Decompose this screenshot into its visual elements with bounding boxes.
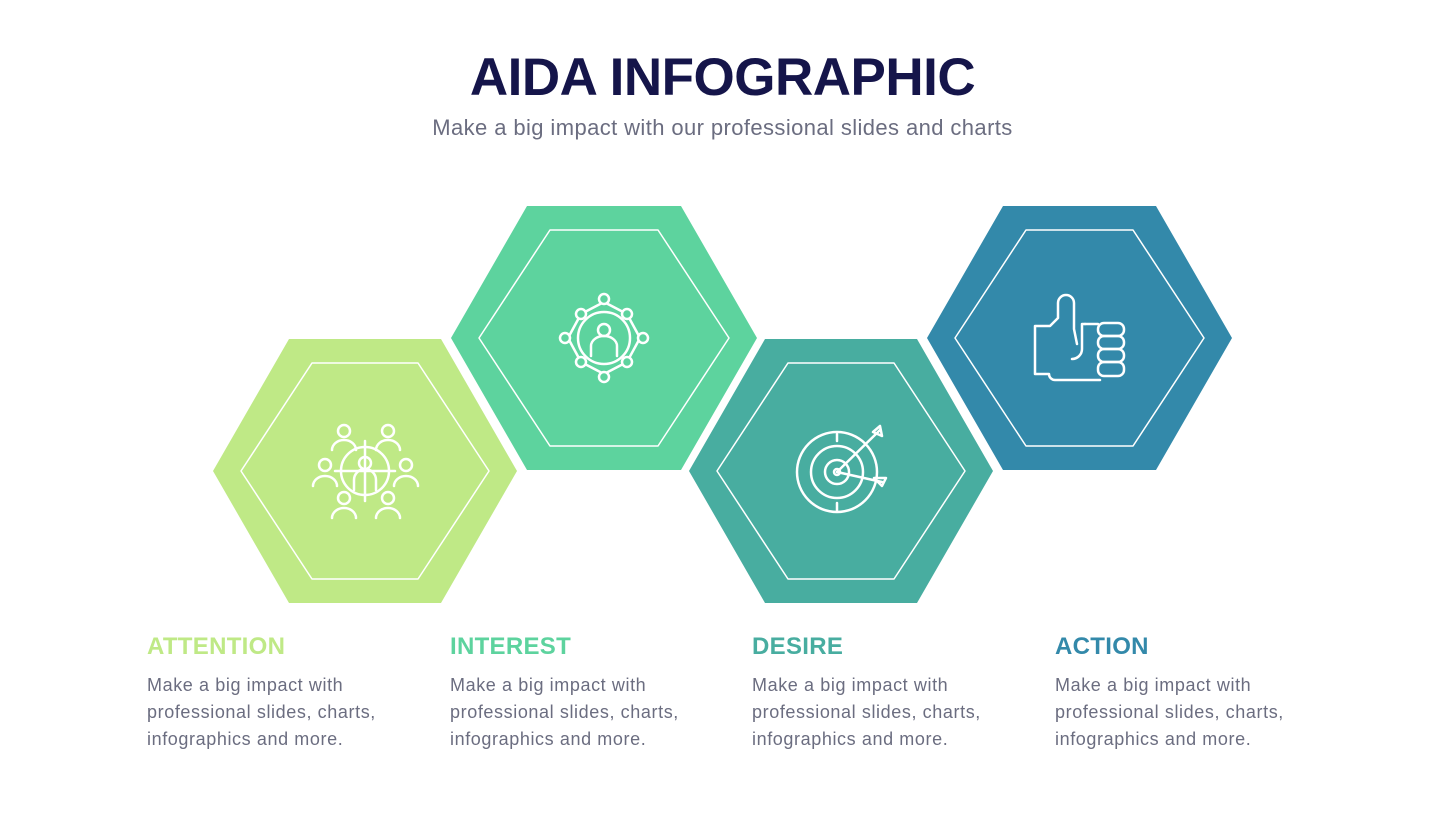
icon: target arrow <box>797 426 886 512</box>
icon: network person <box>560 294 648 382</box>
hexagon: desire <box>689 339 993 603</box>
hexagon: attention <box>213 339 517 603</box>
step: interest <box>450 633 679 749</box>
icon: thumbs up <box>1035 295 1124 380</box>
text: Make a big impact with professional slides, charts, infographics and more. <box>450 675 679 749</box>
text: Make a big impact with professional slides, charts, infographics and more. <box>752 675 981 749</box>
step: action <box>1055 633 1284 749</box>
text: ATTENTION <box>147 633 285 660</box>
hexagon: action <box>927 206 1232 470</box>
icon: audience target <box>313 425 418 518</box>
text: INTEREST <box>450 633 571 660</box>
text: Make a big impact with professional slides, charts, infographics and more. <box>1055 675 1284 749</box>
step: attention <box>147 633 376 749</box>
title: AIDA INFOGRAPHIC <box>470 48 975 107</box>
text: Make a big impact with professional slides, charts, infographics and more. <box>147 675 376 749</box>
hexagon: interest <box>451 206 757 470</box>
text: ACTION <box>1055 633 1149 660</box>
subtitle: Make a big impact with our professional slides and charts <box>432 115 1013 140</box>
text: DESIRE <box>752 633 843 660</box>
step: desire <box>752 633 981 749</box>
